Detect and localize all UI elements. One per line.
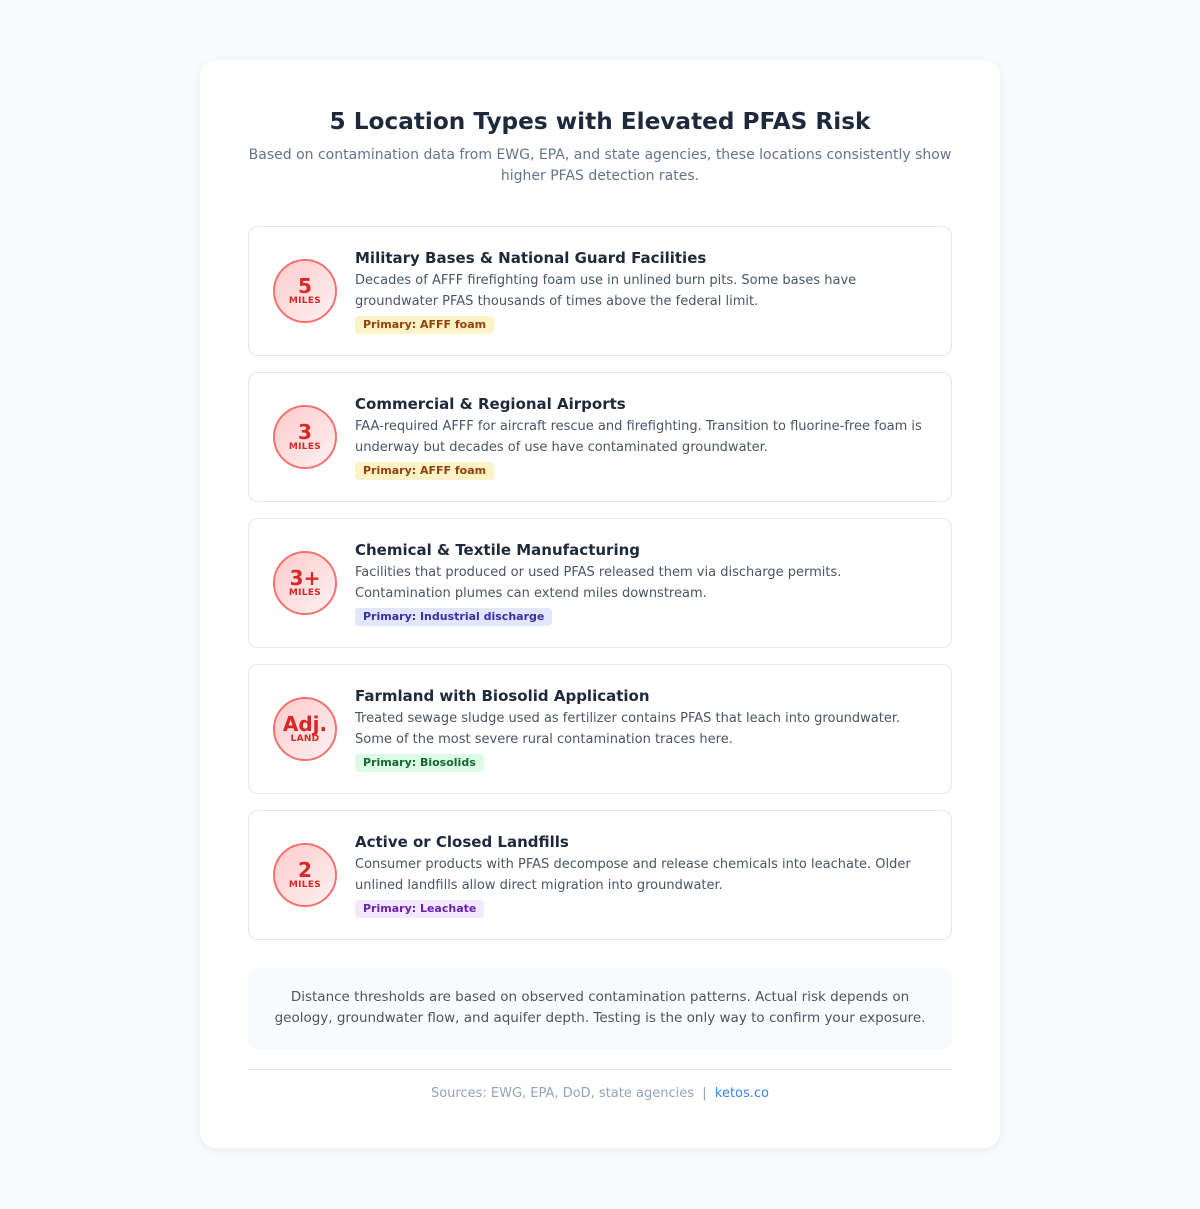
card: farmland: Treated sewage sludge used as fertilizer contains PFAS that leach into groundwater. — [355, 710, 900, 726]
card: airports — [248, 372, 952, 502]
title: 5 Location Types with Elevated PFAS Risk — [330, 108, 870, 135]
card: military bases — [248, 226, 952, 356]
card: landfills: Consumer products with PFAS decompose and release chemicals into leachate. Older unlined landfills allow direct migration into groundwater. — [355, 856, 911, 892]
card: manufacturing: MILES — [289, 588, 321, 598]
card: farmland: Adj. — [283, 712, 327, 736]
card: airports: 3 — [298, 420, 312, 444]
card: military bases: MILES — [289, 296, 321, 306]
card: manufacturing — [248, 518, 952, 648]
card: farmland: LAND — [291, 734, 319, 744]
card: airports: Primary: AFFF foam — [363, 464, 486, 476]
card: airports: Commercial & Regional Airports — [355, 394, 626, 412]
card: landfills: MILES — [289, 880, 321, 890]
card: manufacturing: Facilities that produced or used PFAS released them via discharge permits. — [355, 564, 841, 580]
main panel — [200, 60, 1000, 1148]
card: military bases: Military Bases & National Guard Facilities — [355, 248, 706, 266]
card: landfills: Active or Closed Landfills — [355, 832, 569, 850]
card: airports: FAA-required AFFF for aircraft rescue and firefighting. Transition to fluorine-free foam is underway but decades of use have contaminated groundwater. — [355, 418, 922, 454]
note box: Distance thresholds are based on observed contamination patterns. Actual risk depends on geology, groundwater flow, and aquifer depth. Testing is the only way to confirm your exposure. — [275, 989, 925, 1026]
card: landfills — [248, 810, 952, 940]
card: farmland — [248, 664, 952, 794]
card: manufacturing: 3+ — [290, 566, 320, 590]
card: military bases: Primary: AFFF foam — [363, 318, 486, 330]
card: farmland: Primary: Biosolids — [363, 756, 476, 768]
card: airports: MILES — [289, 442, 321, 452]
card: farmland: Farmland with Biosolid Application — [355, 686, 650, 704]
footer sources — [248, 1069, 952, 1101]
card: manufacturing: Contamination plumes can extend miles downstream. — [355, 586, 707, 600]
card list — [248, 226, 952, 940]
card: farmland: Some of the most severe rural contamination traces here. — [355, 732, 733, 746]
card: manufacturing: Chemical & Textile Manufacturing — [355, 540, 640, 558]
card: military bases: Decades of AFFF firefighting foam use in unlined burn pits. Some bases have groundwater PFAS thousands of times above the federal limit. — [355, 272, 856, 308]
note box — [248, 968, 952, 1049]
card: landfills: 2 — [298, 858, 312, 882]
card: military bases: 5 — [298, 274, 312, 298]
card: landfills: Primary: Leachate — [363, 902, 476, 914]
card: manufacturing: Primary: Industrial discharge — [363, 610, 544, 622]
footer sources: Sources: EWG, EPA, DoD, state agencies | ketos.co — [431, 1086, 769, 1101]
subtitle: Based on contamination data from EWG, EPA, and state agencies, these locations consistently show higher PFAS detection rates. — [249, 147, 951, 184]
